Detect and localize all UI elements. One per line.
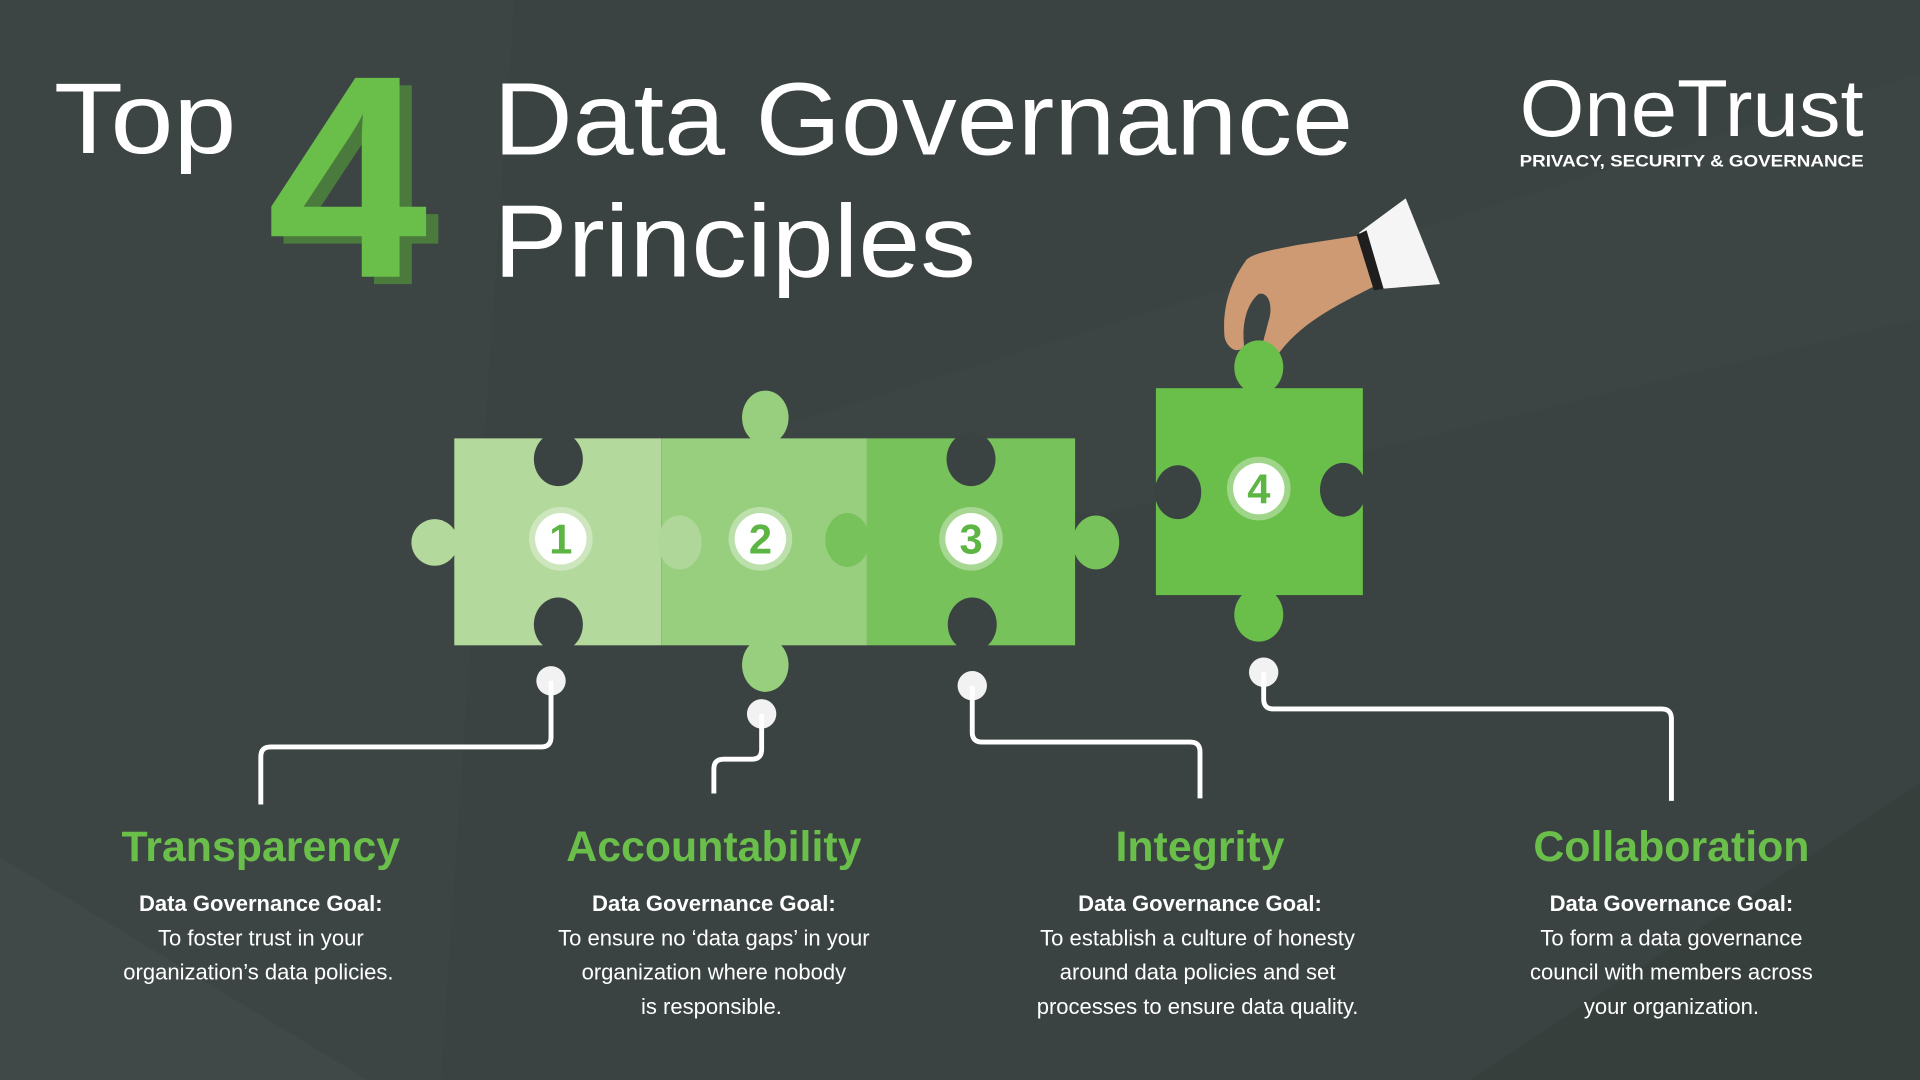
text: Integrity: To establish a culture of honesty — [1040, 925, 1355, 950]
number badges — [529, 457, 1291, 571]
text: Collaboration — [1530, 823, 1813, 1019]
title — [54, 16, 1353, 346]
text: Integrity — [1037, 823, 1358, 1019]
text: Accountability: organization where nobody — [582, 960, 846, 985]
title: 4 — [279, 23, 442, 346]
text: Integrity: Integrity — [1115, 823, 1285, 871]
puzzle piece 2 — [658, 391, 867, 692]
number badges: 1 — [549, 515, 572, 562]
text: Integrity: processes to ensure data quality. — [1037, 994, 1358, 1019]
title: 4 — [267, 16, 429, 339]
text: Integrity: around data policies and set — [1060, 960, 1335, 985]
text: Transparency — [121, 823, 400, 985]
connectors — [261, 658, 1671, 804]
text: Accountability: Accountability — [566, 823, 862, 871]
text: Transparency: To foster trust in your — [158, 925, 364, 950]
title: Data Governance — [493, 61, 1353, 176]
puzzle piece 3 — [825, 432, 1119, 651]
text: Collaboration: Collaboration — [1533, 823, 1809, 871]
text: Transparency: organization’s data policies. — [123, 960, 394, 985]
puzzle piece 1 — [411, 432, 661, 651]
text: Accountability — [558, 823, 870, 1019]
text: Collaboration: To form a data governance — [1540, 925, 1802, 950]
text: Integrity: Data Governance Goal: — [1078, 891, 1322, 916]
title: Principles — [493, 184, 976, 299]
text: Collaboration: council with members across — [1530, 960, 1813, 985]
text: Collaboration: your organization. — [1584, 994, 1759, 1019]
number badges: 3 — [959, 515, 983, 562]
text: Accountability: Data Governance Goal: — [592, 891, 836, 916]
text: Collaboration: Data Governance Goal: — [1550, 891, 1793, 916]
text: Accountability: To ensure no ‘data gaps’ in your — [558, 925, 870, 950]
icon: hand holding piece — [1224, 198, 1440, 358]
puzzle piece 4 — [1155, 340, 1367, 642]
number badges: 2 — [749, 515, 772, 562]
logo: OneTrust: PRIVACY, SECURITY & GOVERNANCE — [1520, 152, 1864, 171]
text: Accountability: is responsible. — [641, 994, 782, 1019]
title: Top — [54, 63, 236, 175]
logo: OneTrust: OneTrust — [1520, 64, 1864, 154]
text: Transparency: Data Governance Goal: — [139, 891, 383, 916]
number badges: 4 — [1247, 465, 1270, 512]
text: Transparency: Transparency — [121, 823, 400, 871]
